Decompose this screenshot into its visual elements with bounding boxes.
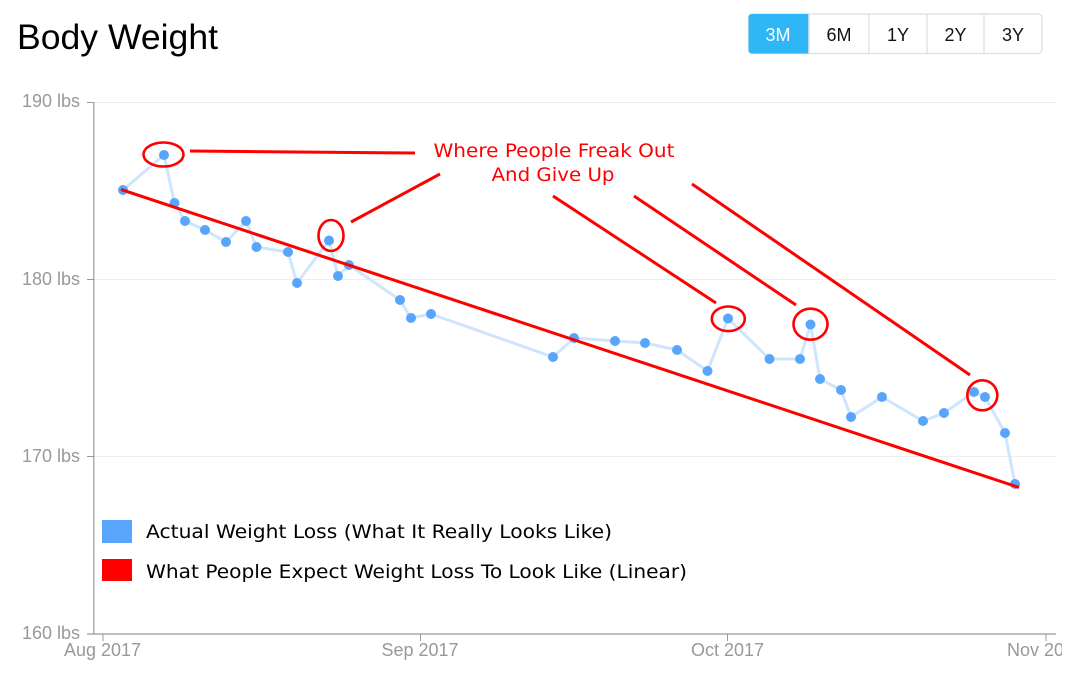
callout text: And Give Up bbox=[492, 164, 614, 186]
x axis labels: Oct 2017 bbox=[691, 640, 764, 660]
range selector buttons bbox=[748, 14, 1042, 54]
legend: Actual Weight Loss (What It Really Looks Like) bbox=[146, 521, 612, 543]
range selector buttons: 6M bbox=[826, 25, 852, 45]
callout text bbox=[434, 140, 674, 186]
actual weight data points bbox=[118, 150, 1020, 489]
red circles around freak-out points bbox=[144, 142, 997, 410]
legend: What People Expect Weight Loss To Look Like (Linear) bbox=[146, 561, 687, 583]
expected linear weight loss line bbox=[121, 190, 1019, 488]
legend bbox=[102, 520, 687, 583]
title: Body Weight bbox=[17, 18, 218, 57]
x axis labels bbox=[64, 643, 1062, 660]
x axis labels: Sep 2017 bbox=[382, 640, 459, 660]
y axis labels: 170 lbs bbox=[22, 446, 80, 466]
y axis labels: 180 lbs bbox=[22, 269, 80, 289]
range selector buttons: 2Y bbox=[944, 25, 967, 45]
callout text: Where People Freak Out bbox=[434, 140, 674, 162]
x axis labels: Aug 2017 bbox=[64, 640, 141, 660]
range selector buttons: 1Y bbox=[887, 25, 909, 45]
chart axes and gridlines bbox=[87, 102, 1056, 641]
range selector buttons: 3Y bbox=[1002, 25, 1024, 45]
y axis labels: 190 lbs bbox=[22, 91, 80, 111]
range selector buttons: 3M bbox=[765, 25, 791, 45]
y axis labels: 160 lbs bbox=[22, 623, 80, 643]
y axis labels bbox=[22, 91, 80, 643]
actual weight line bbox=[123, 155, 1015, 484]
callout pointer lines bbox=[190, 151, 970, 375]
